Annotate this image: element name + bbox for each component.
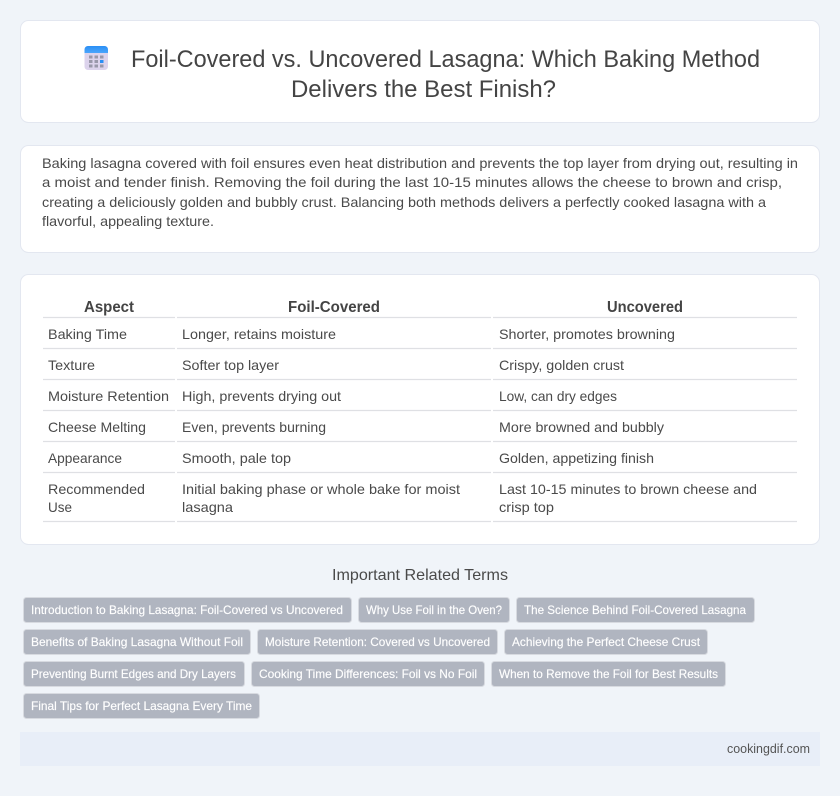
tag: Preventing Burnt Edges and Dry Layers: [31, 667, 236, 681]
row: cheese melting: Even, prevents burning: [182, 419, 326, 435]
tag: [504, 630, 708, 654]
tag list: related terms: [24, 598, 754, 718]
table header row: [84, 299, 683, 316]
panel: summary: [20, 146, 820, 252]
row: recommended use: crisp top: [499, 499, 554, 515]
tag: Moisture Retention: Covered vs Uncovered: [265, 635, 490, 649]
tag: [516, 598, 754, 622]
tag: Benefits of Baking Lasagna Without Foil: [31, 635, 243, 649]
row: appearance: [48, 450, 654, 466]
footer bar: [20, 732, 820, 766]
row: baking time: [48, 326, 675, 342]
title: Delivers the Best Finish?: [291, 76, 556, 103]
row: recommended use: Recommended: [48, 481, 145, 497]
row: baking time: Baking Time: [48, 326, 127, 342]
text block: summary paragraph: creating a deliciously golden and bubbly crust. Balancing both methods delivers a perfectly cooked lasagna with a: [42, 194, 766, 210]
panel: comparison table: [20, 274, 820, 544]
table header row: Foil-Covered: [288, 299, 380, 316]
tag: When to Remove the Foil for Best Results: [499, 667, 718, 681]
row: baking time: Longer, retains moisture: [182, 326, 336, 342]
row: baking time: Shorter, promotes browning: [499, 326, 675, 342]
tag: [492, 662, 726, 686]
row: texture: [48, 357, 624, 373]
row: moisture retention: [48, 388, 617, 404]
row: texture: Softer top layer: [182, 357, 279, 373]
tag: [24, 694, 260, 718]
row: texture: Texture: [48, 357, 95, 373]
heading: important related terms: Important Related Terms: [332, 567, 508, 584]
row: appearance: Smooth, pale top: [182, 450, 291, 466]
panel: header: [20, 20, 820, 122]
table header row: Uncovered: [607, 299, 683, 316]
tag: The Science Behind Foil-Covered Lasagna: [524, 603, 746, 617]
row: texture: Crispy, golden crust: [499, 357, 624, 373]
row: cheese melting: Cheese Melting: [48, 419, 146, 435]
text block: summary paragraph: [42, 155, 798, 229]
tag: Achieving the Perfect Cheese Crust: [512, 635, 701, 649]
row: moisture retention: Low, can dry edges: [499, 388, 617, 404]
title: [131, 46, 760, 103]
row: moisture retention: High, prevents drying out: [182, 388, 341, 404]
text block: summary paragraph: flavorful, appealing texture.: [42, 213, 214, 229]
row: recommended use: Use: [48, 499, 72, 515]
tag: [358, 598, 510, 622]
row: moisture retention: Moisture Retention: [48, 388, 169, 404]
table header row: Aspect: [84, 299, 134, 316]
tag: Why Use Foil in the Oven?: [366, 603, 502, 617]
row: appearance: Golden, appetizing finish: [499, 450, 654, 466]
tag: Cooking Time Differences: Foil vs No Foil: [259, 667, 477, 681]
row: cheese melting: More browned and bubbly: [499, 419, 664, 435]
icon: calendar: [84, 46, 108, 70]
row: cheese melting: [48, 419, 664, 435]
tag: [24, 662, 244, 686]
row: recommended use: lasagna: [182, 499, 233, 515]
title: Foil-Covered vs. Uncovered Lasagna: Which Baking Method: [131, 46, 760, 73]
tag: [258, 630, 498, 654]
tag: [24, 598, 352, 622]
footer source text: cookingdif.com: [727, 742, 810, 756]
text block: summary paragraph: a moist and tender finish. Removing the foil during the last 10-15 minutes allows the cheese to brown and crisp,: [42, 174, 782, 190]
row: recommended use: [48, 481, 757, 515]
row: appearance: Appearance: [48, 450, 122, 466]
tag: [24, 630, 250, 654]
tag: [252, 662, 484, 686]
row: recommended use: Initial baking phase or whole bake for moist: [182, 481, 460, 497]
tag: Final Tips for Perfect Lasagna Every Time: [31, 699, 252, 713]
text block: summary paragraph: Baking lasagna covered with foil ensures even heat distribution and prevents the top layer from drying out, resulting in: [42, 155, 798, 171]
tag: Introduction to Baking Lasagna: Foil-Covered vs Uncovered: [31, 603, 343, 617]
row: recommended use: Last 10-15 minutes to brown cheese and: [499, 481, 757, 497]
